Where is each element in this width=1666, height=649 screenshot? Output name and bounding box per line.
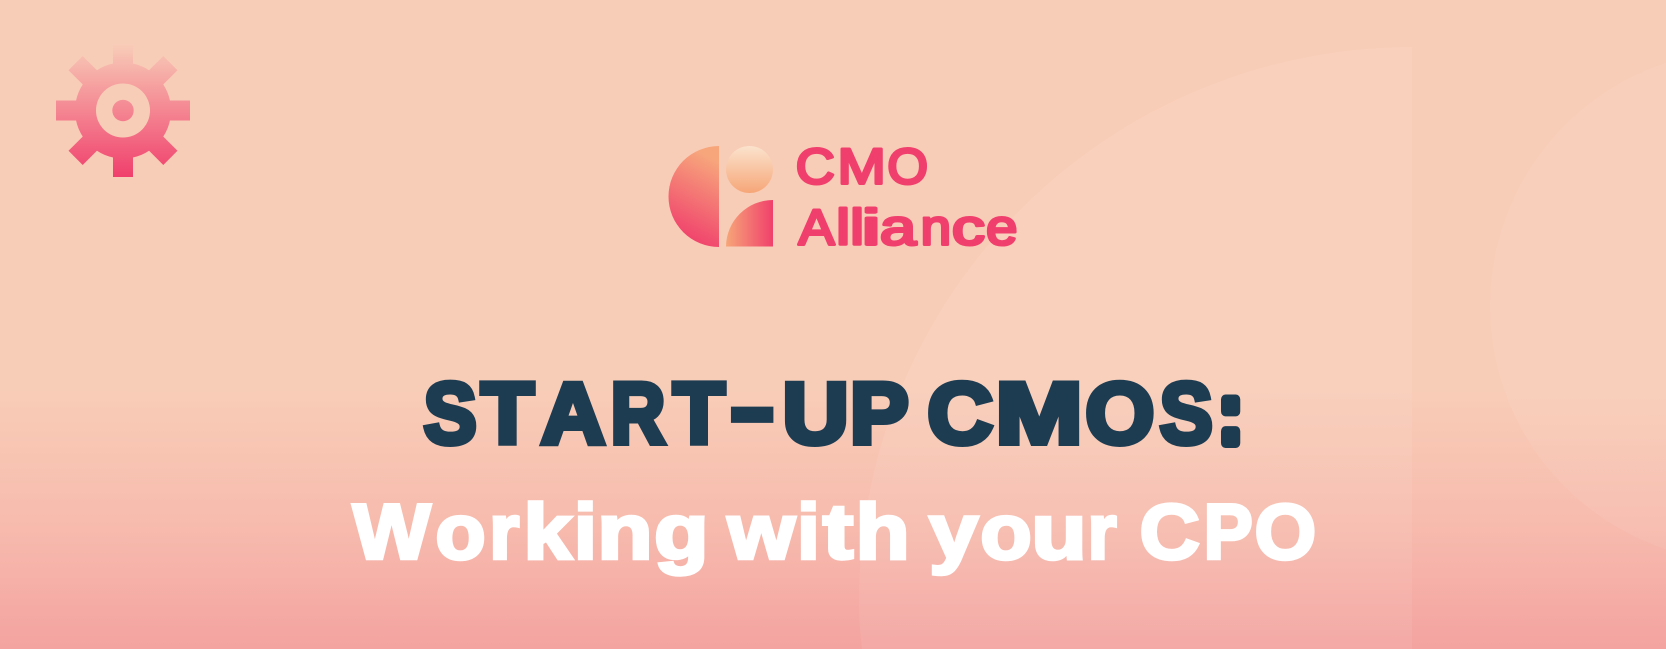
- subtitle: o: [436, 488, 486, 576]
- subtitle: k: [524, 488, 572, 576]
- subtitle: P: [1204, 488, 1253, 576]
- logo mark: half disc: [668, 146, 719, 247]
- logo wordmark: Alliance: i: [861, 200, 881, 256]
- subtitle: u: [1031, 488, 1087, 576]
- decorative large arch shape: [859, 47, 1412, 649]
- logo mark: quarter circle: [726, 200, 773, 246]
- title: O: [1086, 366, 1154, 462]
- title: S: [424, 366, 477, 462]
- logo: CMO Alliance: [668, 138, 1018, 256]
- logo wordmark: Alliance: c: [952, 200, 985, 256]
- title: T: [481, 366, 534, 462]
- subtitle: o: [980, 488, 1032, 576]
- subtitle: h: [856, 488, 910, 576]
- title: M: [996, 366, 1083, 462]
- title: P: [850, 366, 907, 462]
- logo wordmark: Alliance: l: [850, 200, 864, 256]
- logo wordmark: Alliance: e: [986, 200, 1018, 256]
- logo wordmark: Alliance: l: [836, 200, 850, 256]
- title: -: [730, 360, 774, 456]
- subtitle: i: [574, 488, 597, 576]
- logo wordmark: Alliance: a: [880, 200, 916, 256]
- icon: gear: [56, 44, 190, 177]
- subtitle: r: [1088, 488, 1116, 576]
- subtitle: O: [1255, 488, 1316, 576]
- logo wordmark: CMO: O: [887, 138, 928, 194]
- logo wordmark: CMO: M: [838, 138, 886, 194]
- logo wordmark: CMO: C: [796, 138, 835, 194]
- subtitle: W: [353, 488, 431, 576]
- title: C: [928, 366, 993, 462]
- decorative circle right: [1490, 50, 1666, 562]
- subtitle: w: [727, 488, 795, 576]
- subtitle: g: [654, 488, 709, 576]
- title: T: [673, 366, 725, 462]
- logo wordmark: Alliance: A: [798, 200, 835, 256]
- subtitle: i: [797, 488, 820, 576]
- title: U: [783, 366, 849, 462]
- logo mark: circle: [726, 146, 773, 193]
- title: A: [541, 366, 605, 462]
- title: R: [611, 366, 665, 462]
- subtitle: n: [597, 488, 653, 576]
- logo wordmark: Alliance: n: [921, 200, 951, 256]
- subtitle: t: [823, 488, 853, 576]
- subtitle: y: [929, 488, 978, 576]
- subtitle: C: [1140, 488, 1200, 576]
- title: :: [1218, 366, 1243, 462]
- title: S: [1160, 366, 1213, 462]
- subtitle: r: [489, 488, 519, 576]
